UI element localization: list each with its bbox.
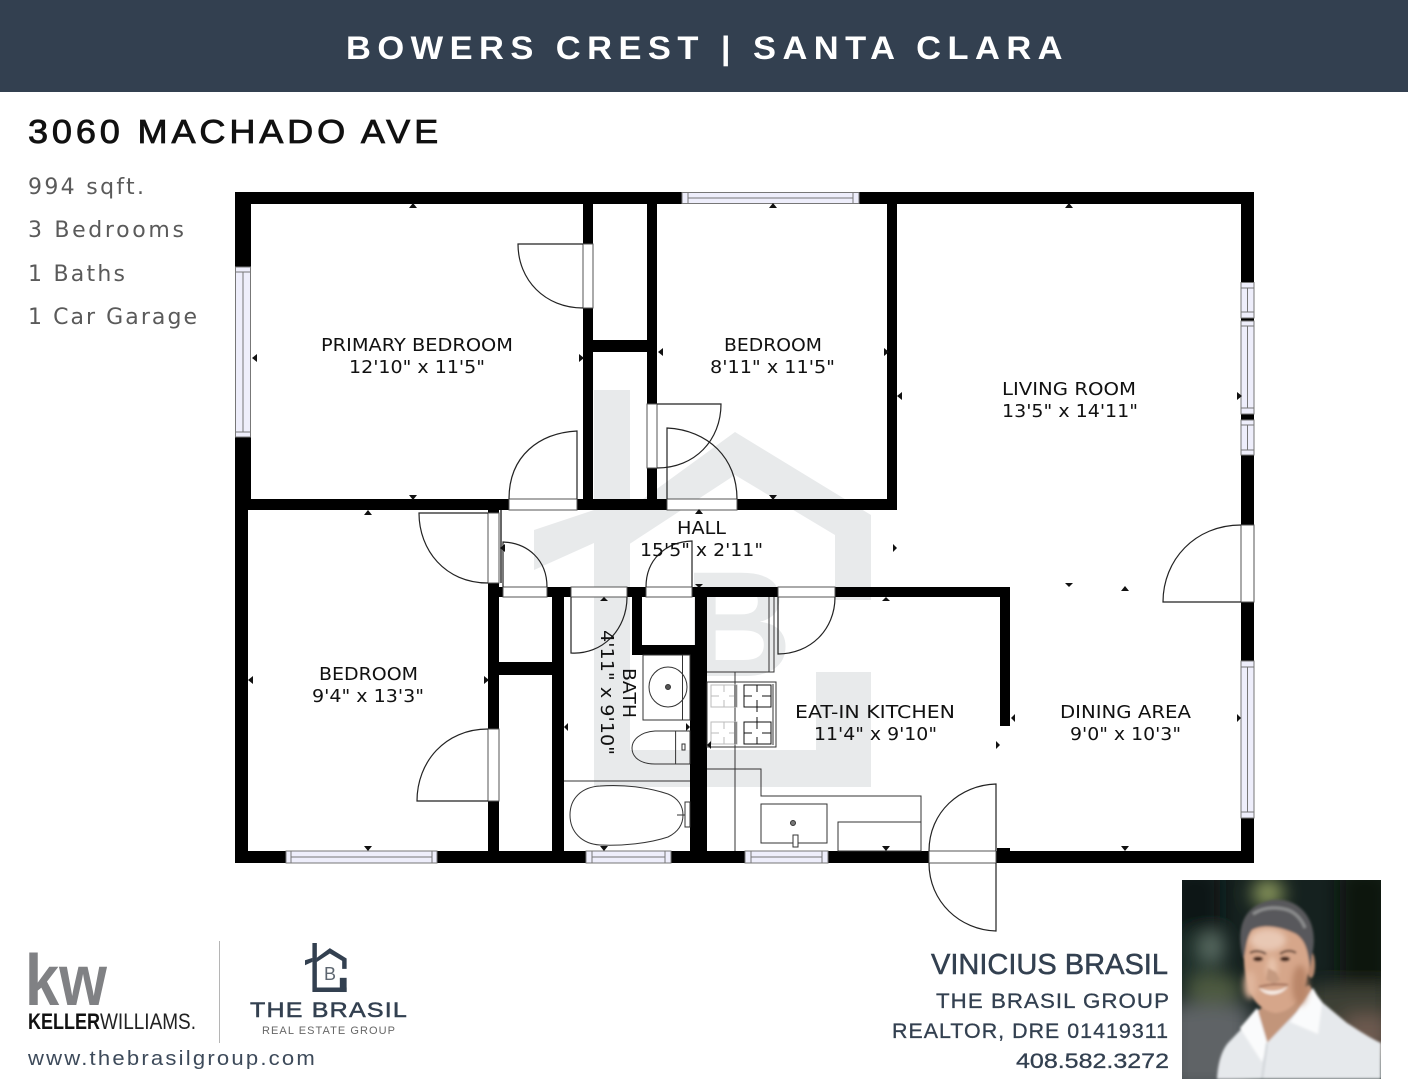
bathroom fixtures [564,655,690,845]
room label: living room [1002,379,1138,422]
brasil group logo: REAL ESTATE GROUP [262,1025,395,1037]
agent contact details: 408.582.3272 [1016,1050,1169,1073]
property stats: 3 Bedrooms [28,218,184,243]
keller williams logo [25,941,196,1034]
room label: bedroom 2: BEDROOM [724,335,822,356]
room label: hall: 15'5" x 2'11" [640,540,763,561]
header banner [0,0,1408,92]
title: BOWERS CREST | SANTA CLARA [346,30,1069,66]
property stats: 1 Baths [28,262,125,287]
agent contact details: VINICIUS BRASIL [931,949,1168,981]
room label: primary bedroom [321,335,513,378]
room label: bedroom 3: BEDROOM [319,664,418,685]
room label: bath: 4'11" x 9'10" [596,630,617,755]
room label: kitchen [795,702,955,745]
room label: bath [596,630,639,755]
property stats: 1 Car Garage [28,305,197,330]
room label: kitchen: EAT-IN KITCHEN [795,702,955,723]
address heading: 3060 MACHADO AVE [28,113,442,150]
measurement markers [248,203,1242,851]
room label: living room: LIVING ROOM [1002,379,1136,400]
room label: kitchen: 11'4" x 9'10" [814,724,937,745]
room label: dining area [1060,702,1192,745]
floor plan [235,192,1254,931]
room label: hall: HALL [677,518,726,539]
website: www.thebrasilgroup.com [27,1048,317,1070]
brasil group logo: THE BRASIL [250,999,408,1022]
keller williams logo: WILLIAMS. [100,1009,196,1034]
room label: dining area: 9'0" x 10'3" [1070,724,1181,745]
agent contact details [892,949,1170,1073]
brasil group logo [250,943,408,1037]
watermark logo: B [684,540,792,708]
room label: primary bedroom: 12'10" x 11'5" [349,357,485,378]
room label: bedroom 3: 9'4" x 13'3" [312,686,424,707]
kitchen fixtures [707,597,921,851]
door swings [417,244,1241,931]
walls [235,192,1254,863]
room label: bedroom 3 [312,664,424,707]
room label: bath: BATH [618,668,639,718]
watermark logo [534,390,871,787]
door openings [488,244,1254,863]
room label: bedroom 2: 8'11" x 11'5" [710,357,835,378]
agent portrait [1182,880,1381,1079]
keller williams logo: kw [25,941,108,1021]
property stats: 994 sqft. [28,175,144,200]
agent contact details: REALTOR, DRE 01419311 [892,1020,1169,1043]
agent contact details: THE BRASIL GROUP [936,990,1170,1013]
room label: hall [640,518,763,561]
room label: living room: 13'5" x 14'11" [1002,401,1138,422]
room label: dining area: DINING AREA [1060,702,1192,723]
room label: primary bedroom: PRIMARY BEDROOM [321,335,513,356]
logo divider [219,941,220,1043]
windows [236,192,1254,863]
brasil group logo: B [324,964,336,984]
property stats [28,175,197,330]
keller williams logo: KELLER [28,1009,100,1034]
room label: bedroom 2 [710,335,835,378]
